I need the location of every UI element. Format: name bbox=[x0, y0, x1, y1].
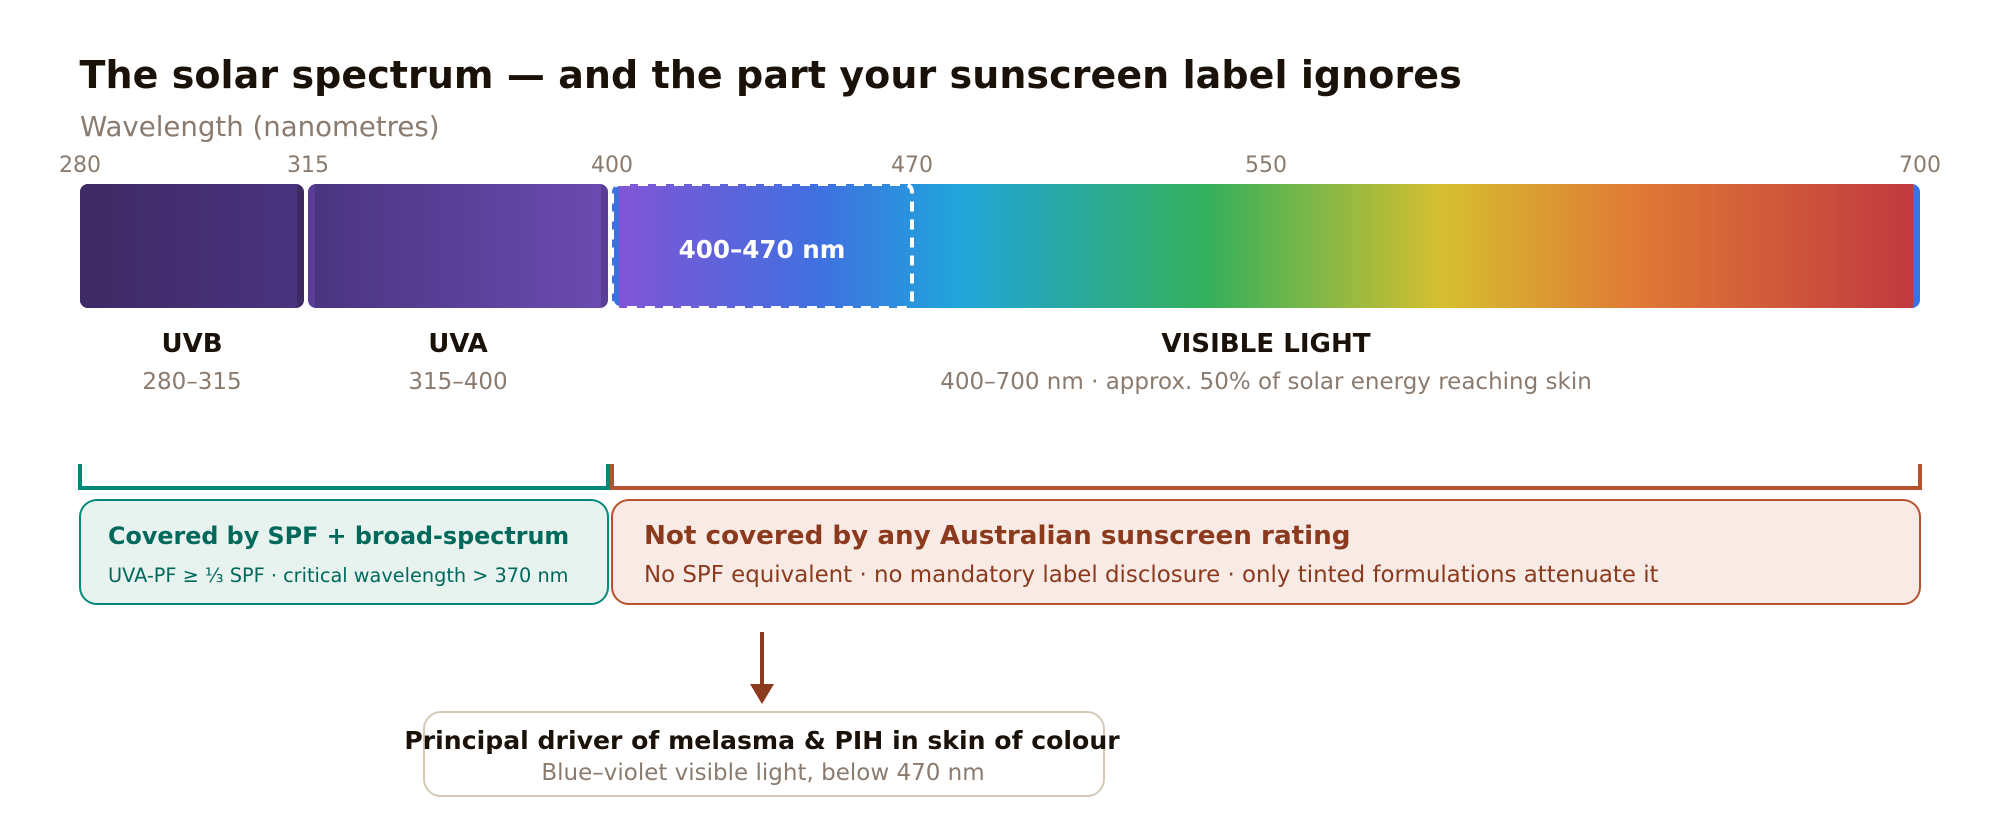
panel: not covered: Not covered by any Australian sunscreen rating bbox=[644, 521, 1350, 551]
label: UVA: UVA bbox=[428, 329, 488, 359]
label: UVB bbox=[142, 329, 242, 395]
band: UVB bbox=[80, 184, 304, 308]
bracket: covered bbox=[80, 464, 608, 488]
tick 700: 700 bbox=[1899, 153, 1941, 178]
label: UVA: 315–400 bbox=[408, 369, 508, 395]
tick 315: 315 bbox=[287, 153, 329, 178]
callout bbox=[423, 711, 1105, 797]
label: UVB: UVB bbox=[161, 329, 223, 359]
tick 280: 280 bbox=[59, 153, 101, 178]
label: UVA bbox=[408, 329, 508, 395]
label: visible light: 400–700 nm · approx. 50% of solar energy reaching skin bbox=[940, 369, 1592, 395]
panel: not covered bbox=[611, 499, 1921, 605]
label: visible light: VISIBLE LIGHT bbox=[1161, 329, 1371, 359]
callout: Blue–violet visible light, below 470 nm bbox=[541, 760, 985, 786]
arrow bbox=[750, 632, 774, 704]
highlight: dashed 400–470 nm window bbox=[612, 184, 912, 308]
bracket: not covered bbox=[612, 464, 1920, 488]
tick 470: 470 bbox=[891, 153, 933, 178]
tick 400: 400 bbox=[591, 153, 633, 178]
callout: Principal driver of melasma & PIH in skin of colour bbox=[404, 726, 1120, 755]
panel: not covered: No SPF equivalent · no mandatory label disclosure · only tinted formulations attenuate it bbox=[644, 562, 1659, 588]
panel: covered: UVA-PF ≥ ⅓ SPF · critical wavelength > 370 nm bbox=[108, 564, 568, 587]
highlight label: 400–470 nm bbox=[679, 235, 845, 264]
panel: covered bbox=[79, 499, 609, 605]
band: visible light bbox=[612, 184, 1920, 308]
tick 550: 550 bbox=[1245, 153, 1287, 178]
subtitle: Wavelength (nanometres) bbox=[80, 110, 440, 143]
label: UVB: 280–315 bbox=[142, 369, 242, 395]
title: The solar spectrum — and the part your sunscreen label ignores bbox=[80, 53, 1462, 97]
band: UVA bbox=[308, 184, 608, 308]
panel: covered: Covered by SPF + broad-spectrum bbox=[108, 522, 569, 550]
label: visible light bbox=[940, 329, 1592, 395]
